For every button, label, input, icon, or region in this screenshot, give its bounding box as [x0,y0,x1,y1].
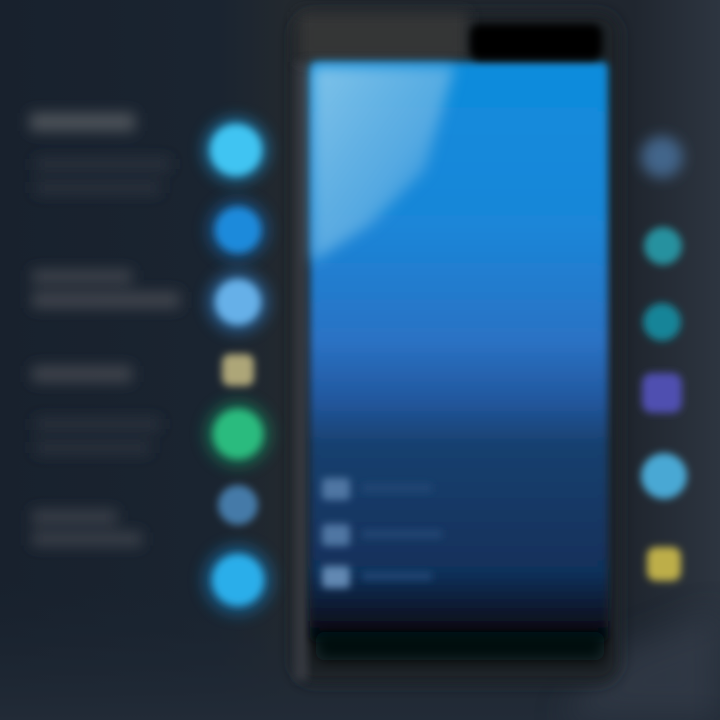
text block 2 heading [32,270,180,308]
text block 1 body [35,158,170,194]
icon: steel blue circle [218,485,258,525]
screen list items [322,478,442,588]
text block 4 [32,510,142,546]
icon: light blue circle [641,453,687,499]
icon: violet square [642,373,682,413]
panel: left text column [30,113,180,546]
icon: blue circle [206,198,270,262]
phone body [292,12,620,684]
right icons [641,136,687,581]
text block 1 heading [30,113,135,131]
phone screen [310,62,608,660]
icon: light blue circle [206,270,270,334]
icon: teal circle [644,227,682,265]
text block 3 body [35,418,160,454]
icon: green circle [204,400,272,468]
icon: cyan circle [202,116,270,184]
phone notch [470,24,602,60]
icon: dark teal circle [643,303,681,341]
icon: yellow square [647,547,681,581]
icon: slate circle [641,136,683,178]
icon: tan square [222,354,254,386]
icon: sky blue circle [202,544,274,616]
screen bottom bezel [316,632,604,660]
left icons [202,116,274,616]
text block 3 heading [32,366,132,382]
screen light reflection [312,66,455,262]
